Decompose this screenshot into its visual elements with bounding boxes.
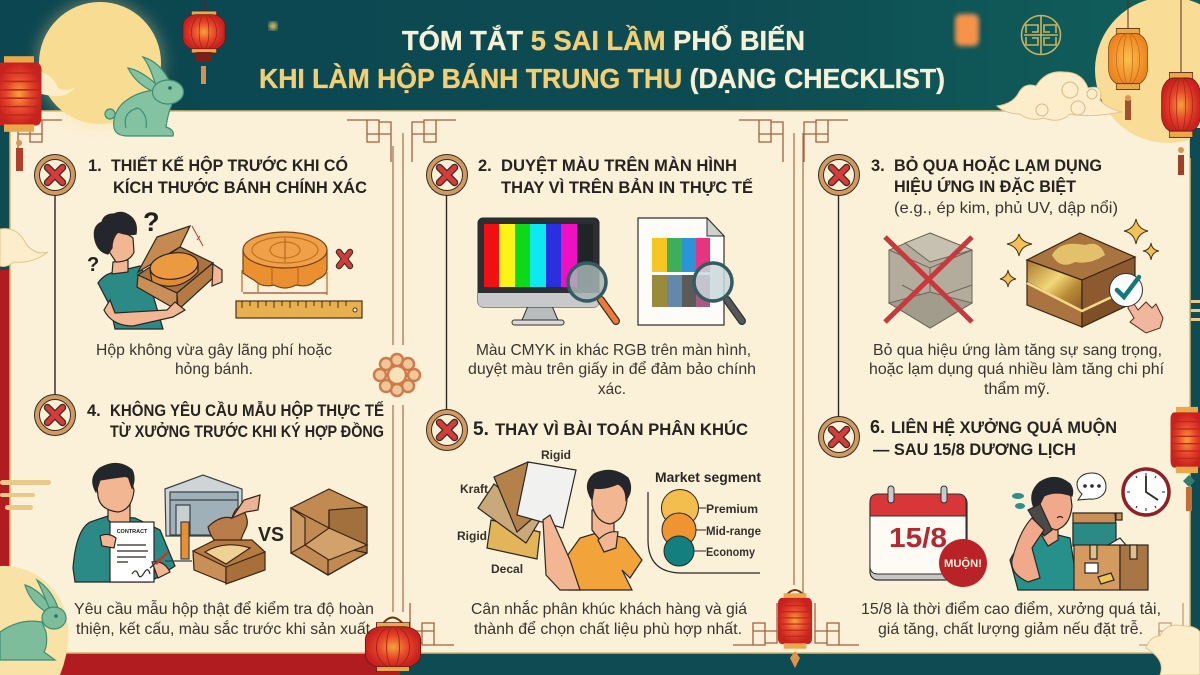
heading 2: 2. [478,157,492,175]
heading 3: 3. [871,157,885,175]
icon: question marks: ? [143,207,160,237]
illustration: factory [165,475,242,561]
illustration: monitor with colour bars [478,218,599,325]
lantern: bottom middle [778,590,812,668]
icon: clock [1123,469,1169,515]
icon: sweat drops [1012,493,1025,509]
decor: gold stripes left [0,480,51,510]
description 1 [96,342,332,378]
decor: clouds top right [997,72,1122,120]
icon: red cross [339,252,350,266]
illustration: foil gift box [1027,233,1135,327]
icon: error 5 [426,410,468,450]
illustration: plain box crossed out [885,233,972,328]
heading 4: 4. [87,402,101,420]
lantern: top right red [1162,0,1200,175]
decor: cloud bottom right [1146,625,1200,675]
description 6: 15/8 là thời điểm cao điểm, xưởng quá tải, [861,600,1161,618]
chart: market segment [648,469,761,573]
description 3 [869,342,1165,398]
illustration: person with contract [73,463,175,582]
heading 2: THAY VÌ TRÊN BẢN IN THỰC TẾ [501,178,753,197]
label: VS: VS [258,524,284,546]
heading 6: 6. [870,417,885,437]
illustration: material samples [478,462,576,559]
chart: market segment: Market segment [655,469,761,485]
rabbit: top left [105,57,184,136]
description 5: thành để chọn chất liệu phù hợp nhất. [474,620,742,638]
description 4: thiện, kết cấu, màu sắc trước khi sản xuất [76,619,371,638]
description 3: thẩm mỹ. [984,380,1050,398]
heading 5: 5. [473,419,489,440]
panel: mistake 4 [34,394,384,638]
decor: gold stripes right [1191,300,1200,321]
illustration: ruler [236,301,362,318]
title [259,25,945,94]
icon: flower ornament [374,354,420,396]
description 3: hoặc lạm dụng quá nhiều làm tăng chi phí [869,361,1165,378]
panel: mistake 3 [818,154,1165,417]
decor: cloud top left [41,72,76,96]
lantern: right side [1170,407,1200,511]
sample labels: Kraft [460,482,488,496]
heading 3 [871,156,1118,217]
heading 5: THAY VÌ BÀI TOÁN PHÂN KHÚC [495,420,748,439]
panel: mistake 6 [818,416,1169,638]
description 4 [74,599,374,638]
sample labels: Rigid [541,448,571,462]
heading 4: KHÔNG YÊU CẦU MẪU HỘP THỰC TẾ [110,401,384,420]
description 3: Bỏ qua hiệu ứng làm tăng sự sang trọng, [873,342,1162,359]
decor: cloud left [0,229,48,266]
lantern: hanging top left [183,0,225,84]
lantern: left red [0,56,42,171]
decor: small star [269,22,277,30]
chart: market segment: Premium [706,502,758,516]
moon: bottom left [0,566,68,675]
illustration: printed sheet [638,218,724,325]
badge: late [939,539,987,587]
moon: top left [36,0,164,127]
icon: sparkles [1000,219,1159,287]
heading 6 [870,417,1117,459]
panel: mistake 5 [426,410,761,638]
description 4: Yêu cầu mẫu hộp thật để kiểm tra độ hoàn [74,599,374,618]
sample labels: Rigid [457,529,487,543]
illustration: stacked parcels [1073,513,1148,590]
icon: error 4 [34,394,76,436]
description 6 [861,600,1161,638]
icon: question marks [87,207,160,276]
sample labels: Decal [491,562,523,576]
timeline connector 3 to 6 [838,195,840,417]
description 2 [468,342,756,398]
description 1: Hộp không vừa gây lãng phí hoặc [96,342,332,359]
icon: error 1 [34,154,76,196]
description 5: Cân nhắc phân khúc khách hàng và giá [471,599,747,618]
illustration: open box with sample [193,495,265,584]
description 2: xác. [598,381,626,398]
icon: error 6 [818,416,860,458]
illustration: calendar [870,486,967,580]
illustration: person with contract: CONTRACT [117,529,148,535]
panel: mistake 2 [426,154,756,412]
illustration: stressed person on phone [1010,477,1078,590]
description 6: giá tăng, chất lượng giảm nếu đặt trễ. [878,619,1143,638]
icon: longevity emblem [1022,16,1060,54]
icon: speech bubble [1077,473,1106,500]
heading 3: (e.g., ép kim, phủ UV, dập nổi) [894,199,1118,217]
icon: magnifier grey [694,263,742,321]
heading 3: HIỆU ỨNG IN ĐẶC BIỆT [894,177,1076,196]
heading 1: THIẾT KẾ HỘP TRƯỚC KHI CÓ [111,156,348,175]
title: KHI LÀM HỘP BÁNH TRUNG THU (DẠNG CHECKLIST) [259,62,945,94]
description 2: Màu CMYK in khác RGB trên màn hình, [476,342,751,359]
rabbit: bottom left [0,580,66,660]
illustration: calendar: 15/8 [889,522,947,553]
lantern: top right orange [1108,0,1148,120]
lantern: bottom [365,618,421,671]
heading 6: — SAU 15/8 DƯƠNG LỊCH [873,441,1076,459]
illustration: thinking person [543,470,642,590]
heading 3: BỎ QUA HOẶC LẠM DỤNG [894,156,1102,175]
icon: check and pointing hand [1110,274,1163,333]
timeline connector 2 to 5 [446,195,448,412]
heading 4 [87,401,384,441]
illustration: mooncake [242,232,327,295]
column divider lines [393,133,803,612]
chart: market segment: Economy [706,545,755,559]
heading 6: LIÊN HỆ XƯỞNG QUÁ MUỘN [891,418,1117,437]
cream main panel [10,111,1190,653]
icon: magnifier orange [568,263,616,321]
description 5 [471,599,747,638]
icon: error 3 [818,154,860,196]
heading 2 [478,156,753,197]
icon: question marks: ? [87,254,99,276]
moon: top right [1095,0,1200,158]
decor: sky lantern [955,14,979,46]
heading 1: KÍCH THƯỚC BÁNH CHÍNH XÁC [113,178,367,197]
description 1: hỏng bánh. [175,361,253,378]
panel: mistake 1 [34,154,367,396]
badge: late: MUỘN! [944,557,982,570]
sample labels [457,448,571,576]
illustration: finished box [291,489,367,575]
heading 1: 1. [88,157,102,175]
description 2: duyệt màu trên giấy in để đảm bảo chính [468,360,756,378]
heading 1 [88,156,367,197]
timeline connector 1 to 4 [54,195,56,396]
corner ornaments [18,120,1183,645]
icon: error 2 [426,154,468,196]
chart: market segment: Mid-range [706,524,761,538]
heading 4: TỪ XƯỞNG TRƯỚC KHI KÝ HỢP ĐỒNG [110,422,384,441]
illustration: confused person with box [94,212,222,329]
heading 2: DUYỆT MÀU TRÊN MÀN HÌNH [501,156,737,175]
title: TÓM TẮT 5 SAI LẦM PHỔ BIẾN [402,25,805,56]
